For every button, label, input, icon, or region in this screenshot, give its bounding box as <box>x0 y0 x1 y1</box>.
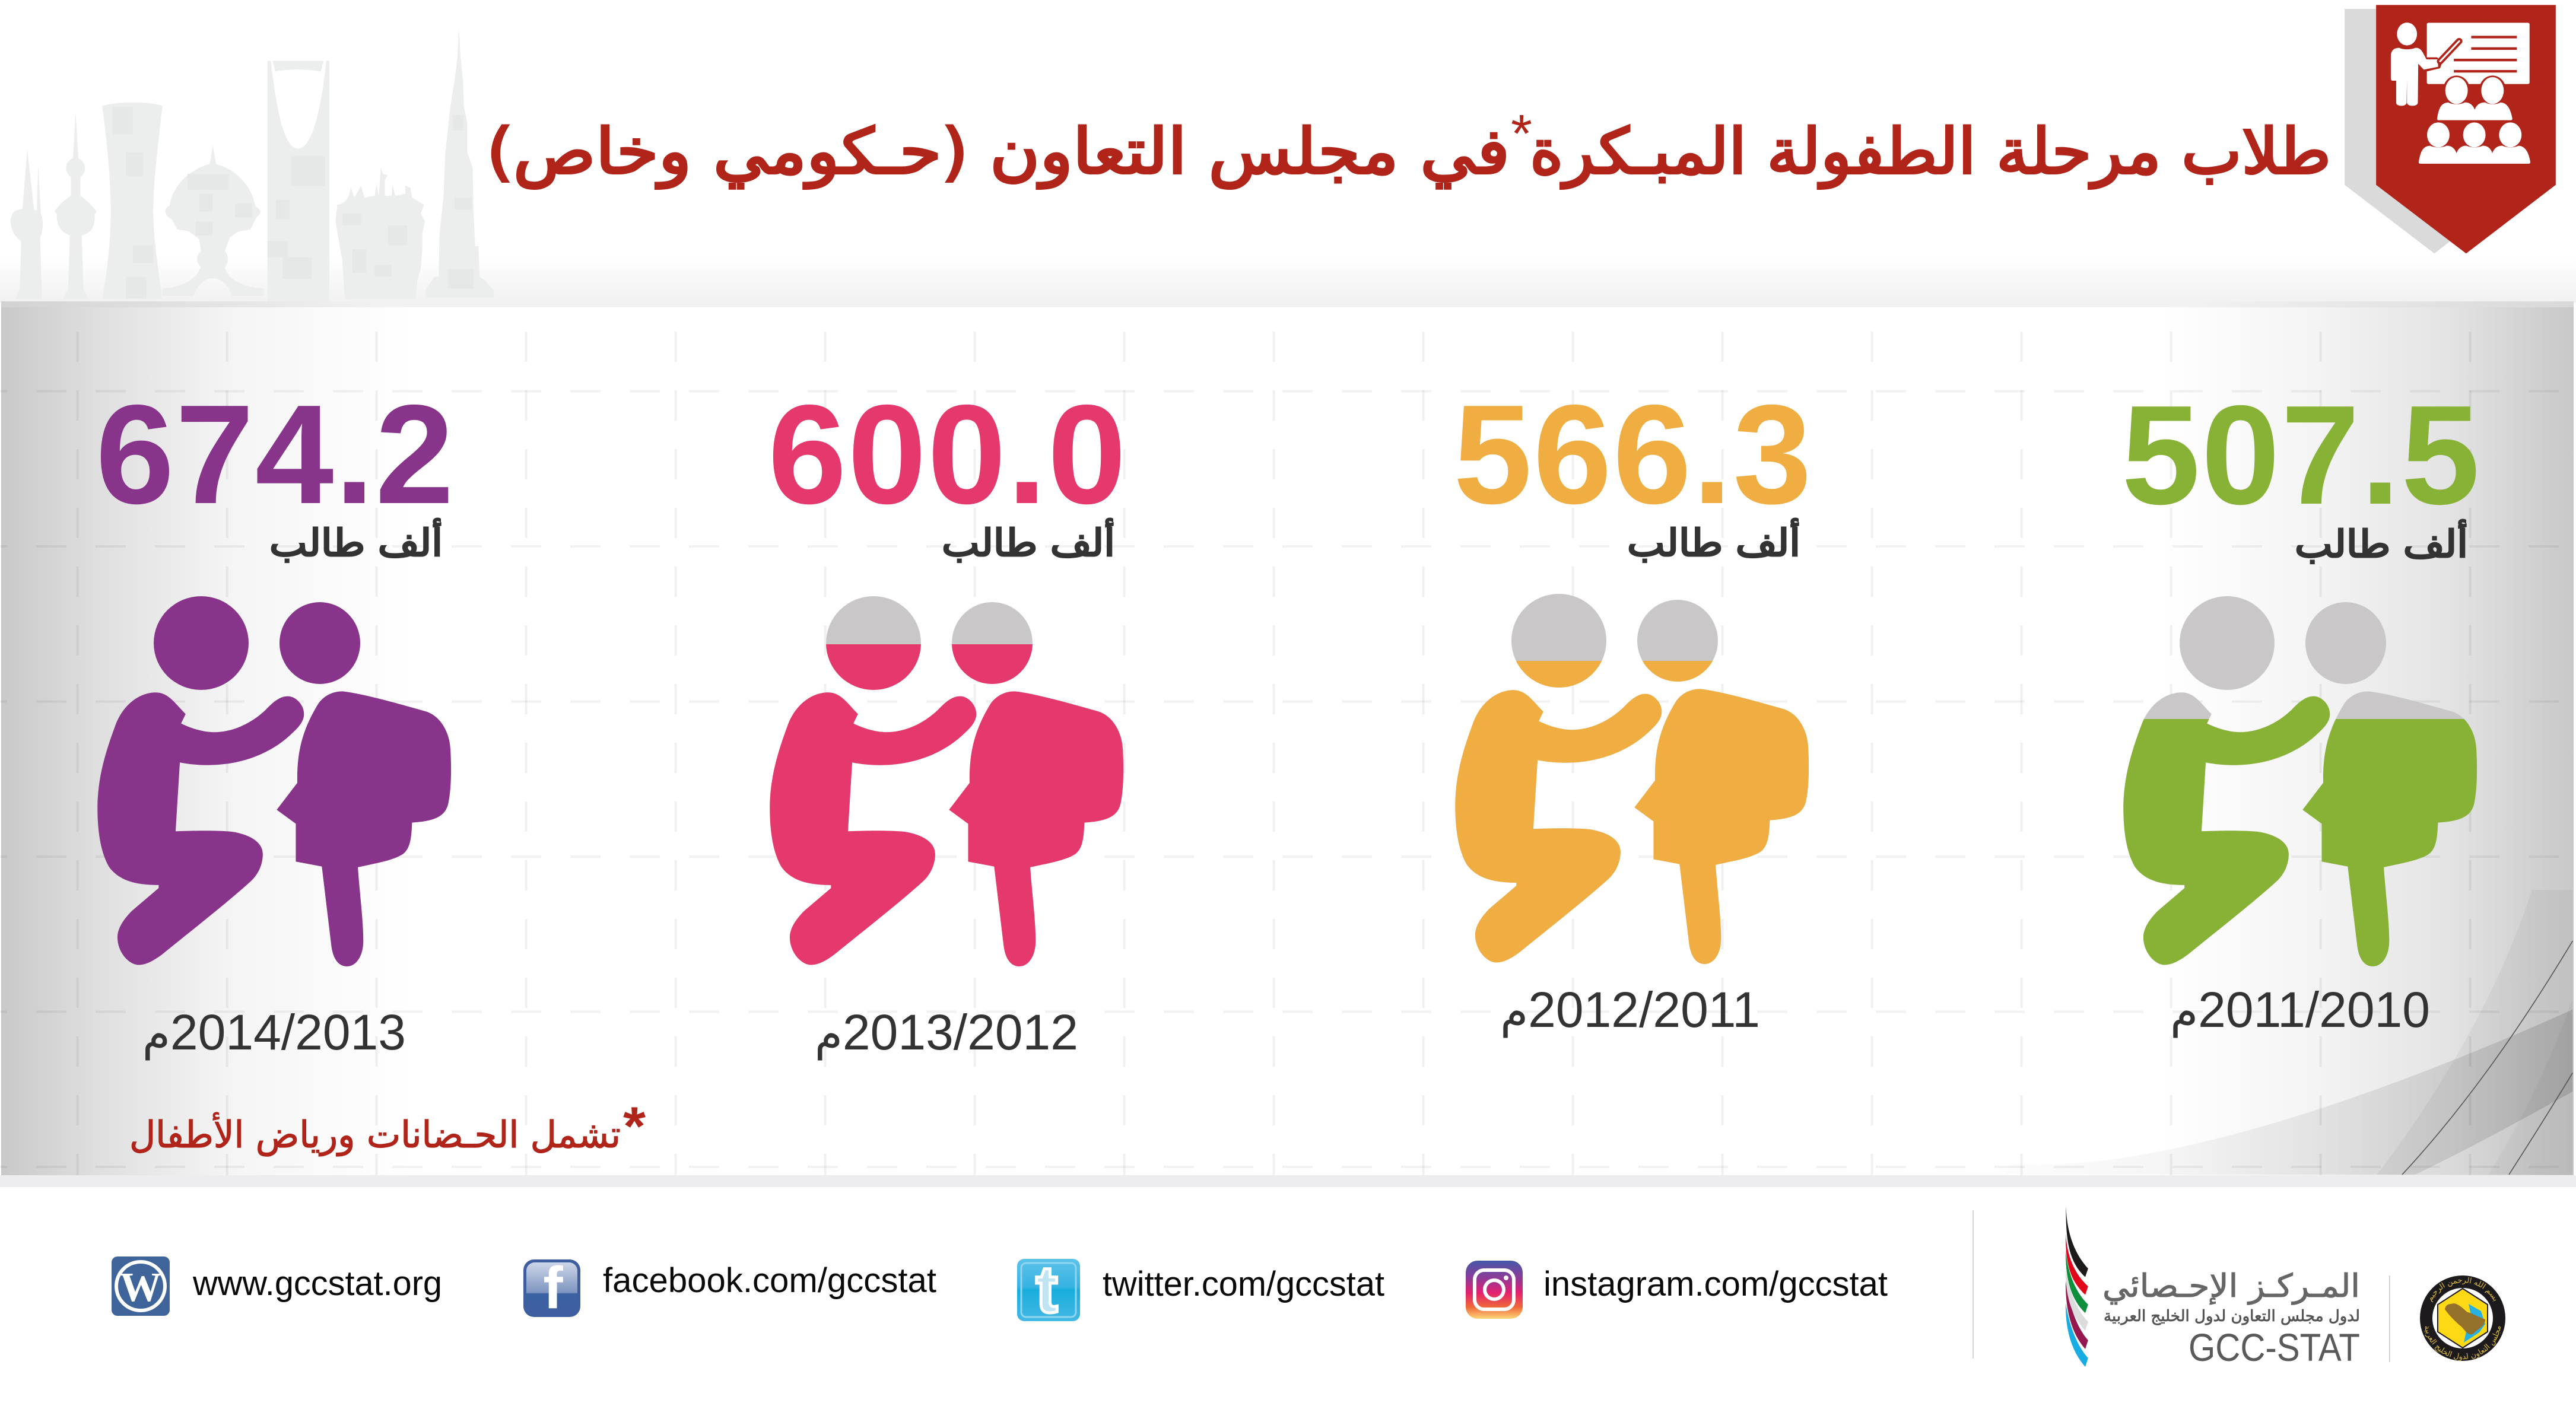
footer: instagram link: instagram.com/gccstat <box>1543 1265 1888 1303</box>
icon: facebook <box>523 1255 580 1321</box>
icon: twitter: t <box>1036 1252 1058 1326</box>
corner swooshes <box>2006 890 2572 1175</box>
footer: instagram link <box>1466 1261 1888 1319</box>
badge with classroom icon <box>2345 5 2556 253</box>
pictogram: children <box>1455 594 1809 964</box>
skyline of Gulf landmarks <box>11 28 494 303</box>
icon: wordpress <box>112 1256 170 1316</box>
footnote: تشمل الحـضانات ورياض الأطفال <box>129 1112 621 1156</box>
logo text: GCC-STAT <box>2189 1325 2360 1369</box>
icon: twitter <box>1017 1252 1080 1326</box>
footer: twitter link <box>1017 1252 1384 1326</box>
icon: ribbons <box>2066 1206 2088 1367</box>
footnote <box>129 1096 646 1157</box>
header shadow band <box>0 255 2576 303</box>
logo text: لدول مجلس التعاون لدول الخليج العربية <box>2104 1308 2360 1325</box>
year: 2014/2013م <box>142 1004 406 1060</box>
unit label: ألف طالب <box>942 518 1115 565</box>
value: 674.2 <box>96 376 455 533</box>
value: 566.3 <box>1453 376 1813 533</box>
title: طلاب مرحلة الطفولة المبـكرة <box>1530 115 2331 189</box>
value: 600.0 <box>768 376 1127 533</box>
icon: facebook: f <box>543 1255 563 1321</box>
footer divider <box>1973 1210 1974 1359</box>
pictogram: children <box>2123 596 2477 966</box>
footer: website link <box>112 1256 442 1316</box>
title: * <box>1511 104 1532 164</box>
logo text: المـركـز الإحـصائي <box>2102 1267 2360 1305</box>
value: 507.5 <box>2121 377 2481 534</box>
year: 2013/2012م <box>815 1004 1078 1060</box>
stat: 2013/2014 purple <box>96 376 455 1060</box>
title: في مجلس التعاون (حـكومي وخاص) <box>487 115 1510 189</box>
icon: GCC emblem: مجلس التعاون لدول الخليج العربية <box>2424 1326 2501 1361</box>
icon: instagram <box>1466 1261 1523 1319</box>
logo text <box>2102 1267 2360 1369</box>
icon: presentation board <box>2427 23 2530 84</box>
footer: twitter link: twitter.com/gccstat <box>1103 1265 1384 1303</box>
stat: 2010/2011 green <box>2121 377 2481 1038</box>
logo: GCC-STAT <box>2065 1207 2505 1369</box>
icon: GCC emblem: بسم الله الرحمن الرحيم <box>2431 1277 2496 1303</box>
stat: 2011/2012 orange <box>1453 376 1813 1038</box>
unit label: ألف طالب <box>1627 518 1800 565</box>
title <box>487 104 2331 189</box>
year: 2011/2010م <box>2170 982 2430 1038</box>
footer: facebook link <box>523 1255 936 1321</box>
pictogram: children <box>97 596 451 966</box>
stat: 2012/2013 pink <box>768 376 1127 1060</box>
panel: statistics background <box>0 301 2576 1187</box>
year: 2012/2011م <box>1500 982 1760 1038</box>
footer: facebook link: facebook.com/gccstat <box>603 1261 936 1300</box>
footer: website link: www.gccstat.org <box>192 1264 442 1303</box>
pictogram: children <box>770 596 1123 966</box>
footnote: * <box>623 1096 646 1157</box>
icon: teacher <box>2391 23 2459 106</box>
icon: GCC emblem <box>2420 1275 2505 1361</box>
unit label: ألف طالب <box>269 518 443 565</box>
unit label: ألف طالب <box>2295 520 2468 566</box>
icon: students <box>2419 75 2530 164</box>
icon: wordpress: W <box>120 1265 161 1310</box>
